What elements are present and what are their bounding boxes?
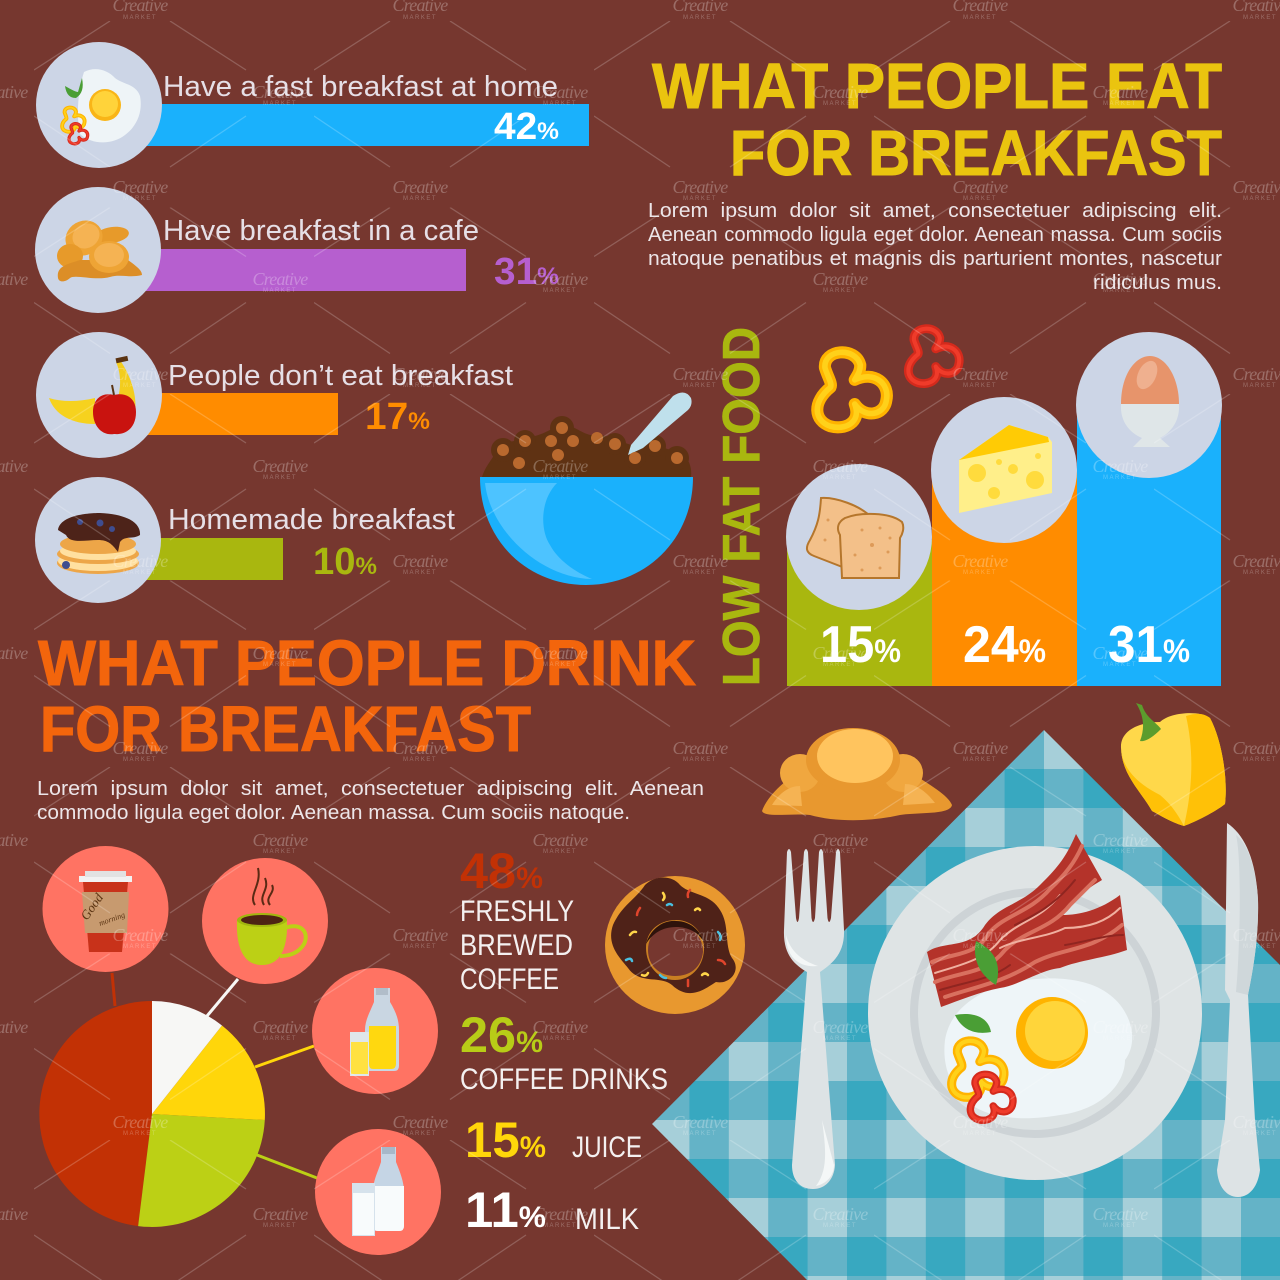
- watermark text: MARKET: [403, 196, 437, 202]
- bar: homemade breakfast: 10%: [313, 541, 377, 583]
- watermark text: MARKET: [403, 757, 437, 763]
- watermark text: MARKET: [1103, 849, 1137, 855]
- column: egg 31%: [1076, 332, 1222, 686]
- watermark text: Creative: [813, 830, 868, 850]
- watermark text: MARKET: [1103, 662, 1137, 668]
- watermark text: Creative: [393, 177, 448, 197]
- icon: take-away coffee: [42, 846, 168, 972]
- legend: milk 11%: [465, 1182, 639, 1238]
- chart: low fat food columns: [786, 332, 1222, 686]
- bar: fast breakfast at home: [36, 42, 589, 168]
- watermark text: MARKET: [683, 196, 717, 202]
- icon: donut: [605, 876, 745, 1014]
- watermark text: MARKET: [263, 1036, 297, 1042]
- legend: freshly brewed coffee 48%: BREWED: [460, 929, 573, 962]
- watermark text: MARKET: [683, 944, 717, 950]
- watermark text: Creative: [393, 551, 448, 571]
- watermark text: MARKET: [1243, 944, 1277, 950]
- watermark text: MARKET: [683, 383, 717, 389]
- fried egg: [944, 978, 1132, 1118]
- bar: breakfast in a cafe: Have breakfast in a cafe: [163, 215, 479, 247]
- watermark text: MARKET: [1243, 1131, 1277, 1137]
- bacon: [927, 834, 1127, 1007]
- column: toast 15%: 15%: [820, 616, 901, 674]
- text block: intro for drinks: [37, 778, 704, 824]
- text block: intro for drinks: Lorem ipsum dolor sit amet, consectetuer adipiscing elit. Aenean: [37, 778, 704, 800]
- watermark text: MARKET: [963, 383, 997, 389]
- panel: breakfast habits bars: [35, 42, 589, 603]
- watermark text: MARKET: [123, 944, 157, 950]
- watermark text: MARKET: [263, 1223, 297, 1229]
- watermark text: Creative: [113, 551, 168, 571]
- watermark text: MARKET: [1103, 101, 1137, 107]
- watermark text: Creative: [673, 738, 728, 758]
- watermark text: MARKET: [823, 288, 857, 294]
- watermark text: Creative: [253, 269, 308, 289]
- watermark text: Creative: [253, 82, 308, 102]
- watermark text: MARKET: [543, 1036, 577, 1042]
- panel: breakfast plate: [868, 834, 1202, 1180]
- text block: intro for food: Lorem ipsum dolor sit amet, consectetuer adipiscing elit.: [648, 200, 1222, 222]
- column: egg 31%: 31%: [1108, 616, 1190, 674]
- title: what people eat: [652, 50, 1222, 189]
- watermark text: MARKET: [963, 757, 997, 763]
- green leaf: [955, 1014, 991, 1033]
- watermark text: MARKET: [543, 288, 577, 294]
- watermark text: Creative: [253, 830, 308, 850]
- watermark text: Creative: [953, 364, 1008, 384]
- watermark text: MARKET: [1243, 757, 1277, 763]
- watermark text: MARKET: [1103, 1036, 1137, 1042]
- watermark text: MARKET: [1243, 196, 1277, 202]
- watermark text: MARKET: [403, 15, 437, 21]
- icon: steaming mug: [202, 858, 328, 984]
- watermark text: Creative: [1093, 269, 1148, 289]
- watermark text: MARKET: [823, 849, 857, 855]
- legend: coffee drinks 26%: COFFEE DRINKS: [460, 1063, 668, 1096]
- bar: breakfast in a cafe: 31%: [494, 251, 559, 293]
- icon: yellow pepper ring: [817, 352, 887, 427]
- watermark text: Creative: [393, 738, 448, 758]
- legend: coffee drinks 26%: 26%: [460, 1007, 543, 1063]
- watermark text: MARKET: [263, 475, 297, 481]
- watermark text: MARKET: [1103, 1223, 1137, 1229]
- basil leaf: [975, 941, 998, 985]
- watermark text: Creative: [393, 925, 448, 945]
- watermark text: Creative: [393, 1112, 448, 1132]
- title: what people drink: WHAT PEOPLE DRINK: [38, 627, 696, 699]
- bar: breakfast in a cafe: [35, 187, 559, 313]
- legend: freshly brewed coffee 48%: COFFEE: [460, 963, 559, 996]
- watermark text: MARKET: [123, 383, 157, 389]
- watermark text: MARKET: [823, 1223, 857, 1229]
- watermark text: Creative: [393, 364, 448, 384]
- watermark text: Creative: [673, 551, 728, 571]
- watermark text: MARKET: [263, 662, 297, 668]
- watermark text: MARKET: [823, 662, 857, 668]
- icon: cereal bowl: [480, 392, 693, 585]
- watermark text: Creative: [1093, 456, 1148, 476]
- watermark text: Creative: [1093, 1017, 1148, 1037]
- text block: intro for drinks: commodo ligula eget dolor. Aenean massa. Cum sociis natoque.: [37, 802, 630, 824]
- watermark text: Creative: [113, 177, 168, 197]
- watermark text: MARKET: [263, 849, 297, 855]
- watermark text: MARKET: [123, 196, 157, 202]
- watermark text: Creative: [533, 643, 588, 663]
- watermark text: MARKET: [543, 849, 577, 855]
- watermark text: MARKET: [263, 101, 297, 107]
- legend: juice 15%: 15%: [465, 1112, 546, 1168]
- watermark text: MARKET: [823, 101, 857, 107]
- watermark text: Creative: [813, 1017, 868, 1037]
- column: toast 15%: [786, 464, 932, 686]
- watermark text: Creative: [533, 82, 588, 102]
- watermark text: MARKET: [403, 944, 437, 950]
- watermark text: Creative: [1093, 1204, 1148, 1224]
- watermark text: Creative: [113, 738, 168, 758]
- watermark text: MARKET: [543, 475, 577, 481]
- icon: red pepper ring: [908, 329, 959, 384]
- watermark text: Creative: [533, 456, 588, 476]
- text block: intro for food: natoque penatibus et magnis dis parturient montes, nascetur: [648, 248, 1222, 270]
- watermark text: Creative: [953, 551, 1008, 571]
- watermark text: MARKET: [963, 15, 997, 21]
- legend: milk 11%: 11%: [465, 1182, 546, 1238]
- text block: intro for food: ridiculus mus.: [1093, 272, 1222, 294]
- watermark text: Creative: [953, 925, 1008, 945]
- icon: large croissant: [762, 728, 952, 820]
- watermark text: Creative: [673, 177, 728, 197]
- watermark text: Creative: [253, 643, 308, 663]
- watermark text: MARKET: [1243, 570, 1277, 576]
- watermark text: Creative: [813, 1204, 868, 1224]
- bar: homemade breakfast: [35, 477, 455, 603]
- icon: milk: [315, 1129, 441, 1255]
- icon: bell pepper: [1121, 703, 1226, 826]
- watermark text: MARKET: [963, 944, 997, 950]
- watermark text: MARKET: [1103, 288, 1137, 294]
- watermark text: MARKET: [263, 288, 297, 294]
- column: cheese 24%: [931, 397, 1077, 686]
- watermark text: MARKET: [963, 196, 997, 202]
- column: cheese 24%: 24%: [963, 616, 1046, 674]
- bar: homemade breakfast: Homemade breakfast: [168, 504, 455, 536]
- title: what people drink: [38, 627, 696, 765]
- watermark text: Creative: [953, 177, 1008, 197]
- watermark text: MARKET: [1243, 383, 1277, 389]
- watermark text: MARKET: [683, 1131, 717, 1137]
- watermark text: Creative: [813, 82, 868, 102]
- watermark text: MARKET: [403, 383, 437, 389]
- watermark text: MARKET: [823, 1036, 857, 1042]
- bar: fast breakfast at home: Have a fast breakfast at home: [163, 71, 558, 103]
- bar: people don't eat breakfast: [36, 332, 513, 458]
- panel: gingham napkin: [652, 730, 1280, 1280]
- watermark text: Creative: [533, 1204, 588, 1224]
- legend: coffee drinks 26%: [460, 1007, 668, 1096]
- watermark text: MARKET: [543, 101, 577, 107]
- watermark text: Creative: [253, 456, 308, 476]
- icon: take-away coffee: Good: [77, 890, 106, 923]
- icon: take-away coffee: morning: [98, 910, 126, 928]
- title: what people drink: FOR BREAKFAST: [40, 693, 531, 765]
- watermark text: MARKET: [403, 570, 437, 576]
- chart: drinks pie with leader lines: [39, 973, 317, 1227]
- watermark text: MARKET: [1103, 475, 1137, 481]
- watermark text: Creative: [113, 364, 168, 384]
- legend: juice 15%: [465, 1112, 642, 1168]
- watermark text: Creative: [673, 364, 728, 384]
- icon: knife: [1217, 823, 1260, 1197]
- bar: people don't eat breakfast: 17%: [365, 396, 430, 438]
- watermark text: MARKET: [683, 757, 717, 763]
- text block: intro for food: Aenean commodo ligula eget dolor. Aenean massa. Cum sociis: [648, 224, 1222, 246]
- watermark text: MARKET: [123, 1131, 157, 1137]
- watermark text: Creative: [673, 925, 728, 945]
- watermark text: MARKET: [123, 757, 157, 763]
- legend: freshly brewed coffee 48%: [460, 843, 574, 996]
- legend: juice 15%: JUICE: [572, 1131, 642, 1164]
- watermark text: Creative: [533, 1017, 588, 1037]
- watermark text: Creative: [813, 456, 868, 476]
- watermark text: MARKET: [543, 1223, 577, 1229]
- title: what people eat: WHAT PEOPLE EAT: [652, 50, 1222, 122]
- icon: fork: [784, 849, 844, 1189]
- bar: people don't eat breakfast: People don’t eat breakfast: [168, 360, 513, 392]
- watermark text: Creative: [533, 269, 588, 289]
- legend: freshly brewed coffee 48%: 48%: [460, 843, 543, 899]
- watermark text: Creative: [1093, 643, 1148, 663]
- watermark text: Creative: [253, 1017, 308, 1037]
- watermark text: MARKET: [683, 15, 717, 21]
- watermark text: Creative: [533, 830, 588, 850]
- legend: freshly brewed coffee 48%: FRESHLY: [460, 895, 574, 928]
- legend: milk 11%: MILK: [575, 1203, 639, 1236]
- watermark text: Creative: [253, 1204, 308, 1224]
- watermark text: Creative: [813, 643, 868, 663]
- pepper rings: [952, 1041, 1013, 1120]
- watermark text: Creative: [673, 1112, 728, 1132]
- watermark text: MARKET: [683, 570, 717, 576]
- watermark text: Creative: [1093, 830, 1148, 850]
- watermark text: MARKET: [963, 1131, 997, 1137]
- watermark text: Creative: [113, 1112, 168, 1132]
- watermark text: MARKET: [123, 15, 157, 21]
- watermark text: Creative: [1093, 82, 1148, 102]
- watermark text: MARKET: [403, 1131, 437, 1137]
- watermark text: MARKET: [963, 570, 997, 576]
- watermark text: Creative: [953, 738, 1008, 758]
- watermark text: Creative: [813, 269, 868, 289]
- watermark text: MARKET: [1243, 15, 1277, 21]
- watermark text: MARKET: [543, 662, 577, 668]
- watermark text: MARKET: [123, 570, 157, 576]
- heading: low fat food: LOW FAT FOOD: [713, 327, 771, 686]
- bar: fast breakfast at home: 42%: [494, 106, 559, 148]
- watermark text: Creative: [113, 925, 168, 945]
- icon: juice: [312, 968, 438, 1094]
- title: what people eat: FOR BREAKFAST: [730, 117, 1222, 189]
- text block: intro for food: [648, 200, 1222, 294]
- watermark text: MARKET: [823, 475, 857, 481]
- watermark text: Creative: [953, 1112, 1008, 1132]
